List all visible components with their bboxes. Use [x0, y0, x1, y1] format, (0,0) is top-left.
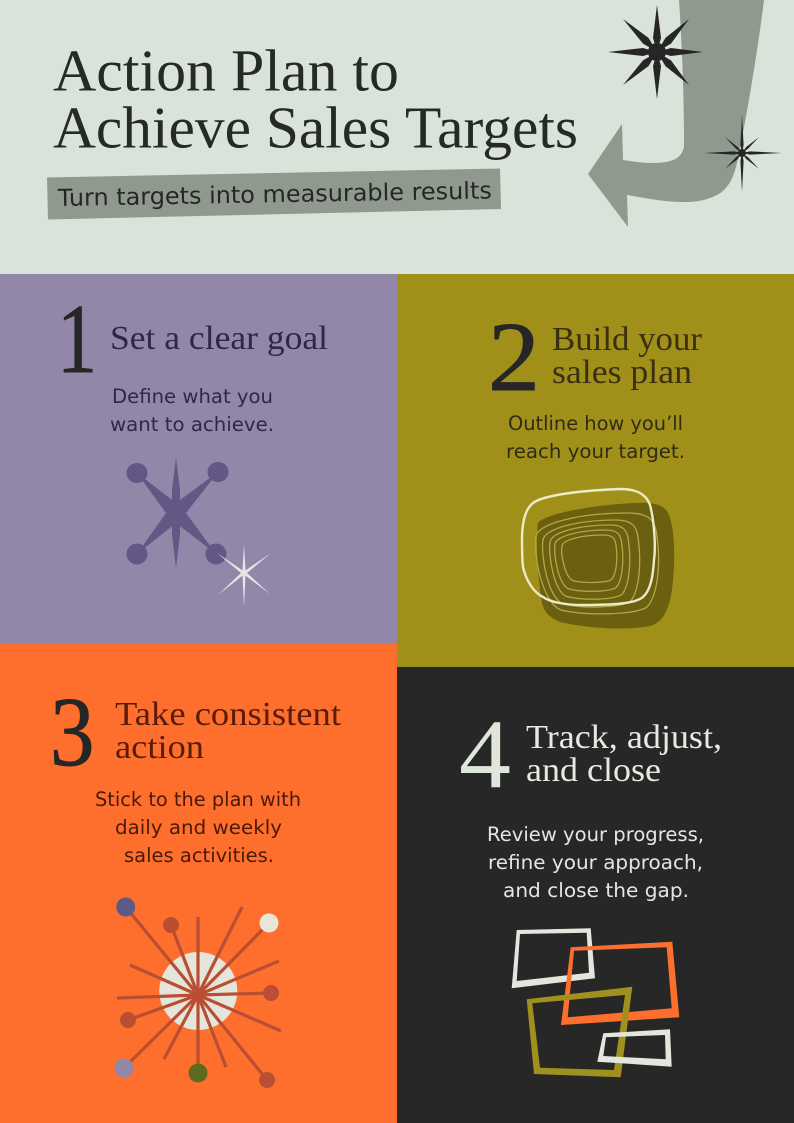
body text: Stick to the plan with	[95, 788, 301, 811]
heading: track, adjust, and close: Track, adjust,	[526, 719, 722, 756]
title: Action Plan to	[53, 38, 399, 104]
title: Achieve Sales Targets	[53, 94, 578, 160]
icon: overlapping frames	[512, 928, 679, 1077]
body text: daily and weekly	[115, 816, 282, 839]
subtitle banner	[47, 168, 501, 220]
body text: sales activities.	[124, 844, 274, 867]
body text	[110, 385, 274, 436]
body text: Review your progress,	[487, 823, 704, 846]
panel: step 2	[397, 274, 794, 667]
step number 1: 1	[57, 285, 97, 394]
panel: step 4	[397, 667, 794, 1123]
title	[53, 38, 578, 160]
panel: header	[0, 0, 794, 274]
body text: refine your approach,	[488, 851, 703, 874]
heading: track, adjust, and close: and close	[526, 752, 661, 789]
body text	[95, 788, 301, 867]
body text	[506, 412, 685, 463]
heading: track, adjust, and close	[526, 719, 722, 789]
icon: purple atomic star with sparkle	[126, 458, 271, 607]
icon: curved arrow	[588, 0, 764, 227]
subtitle banner: Turn targets into measurable results	[57, 176, 492, 212]
step number 2: 2	[488, 303, 540, 412]
heading: build your sales plan	[552, 321, 703, 391]
icon: small star	[704, 115, 782, 192]
icon: starburst with dots	[114, 898, 281, 1088]
body text: Outline how you’ll	[508, 412, 683, 435]
body text: Define what you	[112, 385, 273, 408]
icon: large star	[608, 5, 703, 99]
body text: and close the gap.	[503, 879, 689, 902]
panel: step 1	[0, 274, 397, 643]
heading: take consistent action: Take consistent	[115, 696, 342, 733]
body text	[487, 823, 704, 902]
heading: set a clear goal: Set a clear goal	[110, 320, 328, 357]
panel: step 3	[0, 643, 397, 1123]
icon: concentric organic squares	[522, 489, 674, 629]
heading: build your sales plan: sales plan	[552, 354, 692, 391]
body text: reach your target.	[506, 440, 685, 463]
body text: want to achieve.	[110, 413, 274, 436]
heading: take consistent action: action	[115, 729, 204, 766]
heading: take consistent action	[115, 696, 342, 766]
heading: build your sales plan: Build your	[552, 321, 703, 358]
step number 3: 3	[50, 678, 94, 787]
step number 4: 4	[459, 700, 511, 809]
